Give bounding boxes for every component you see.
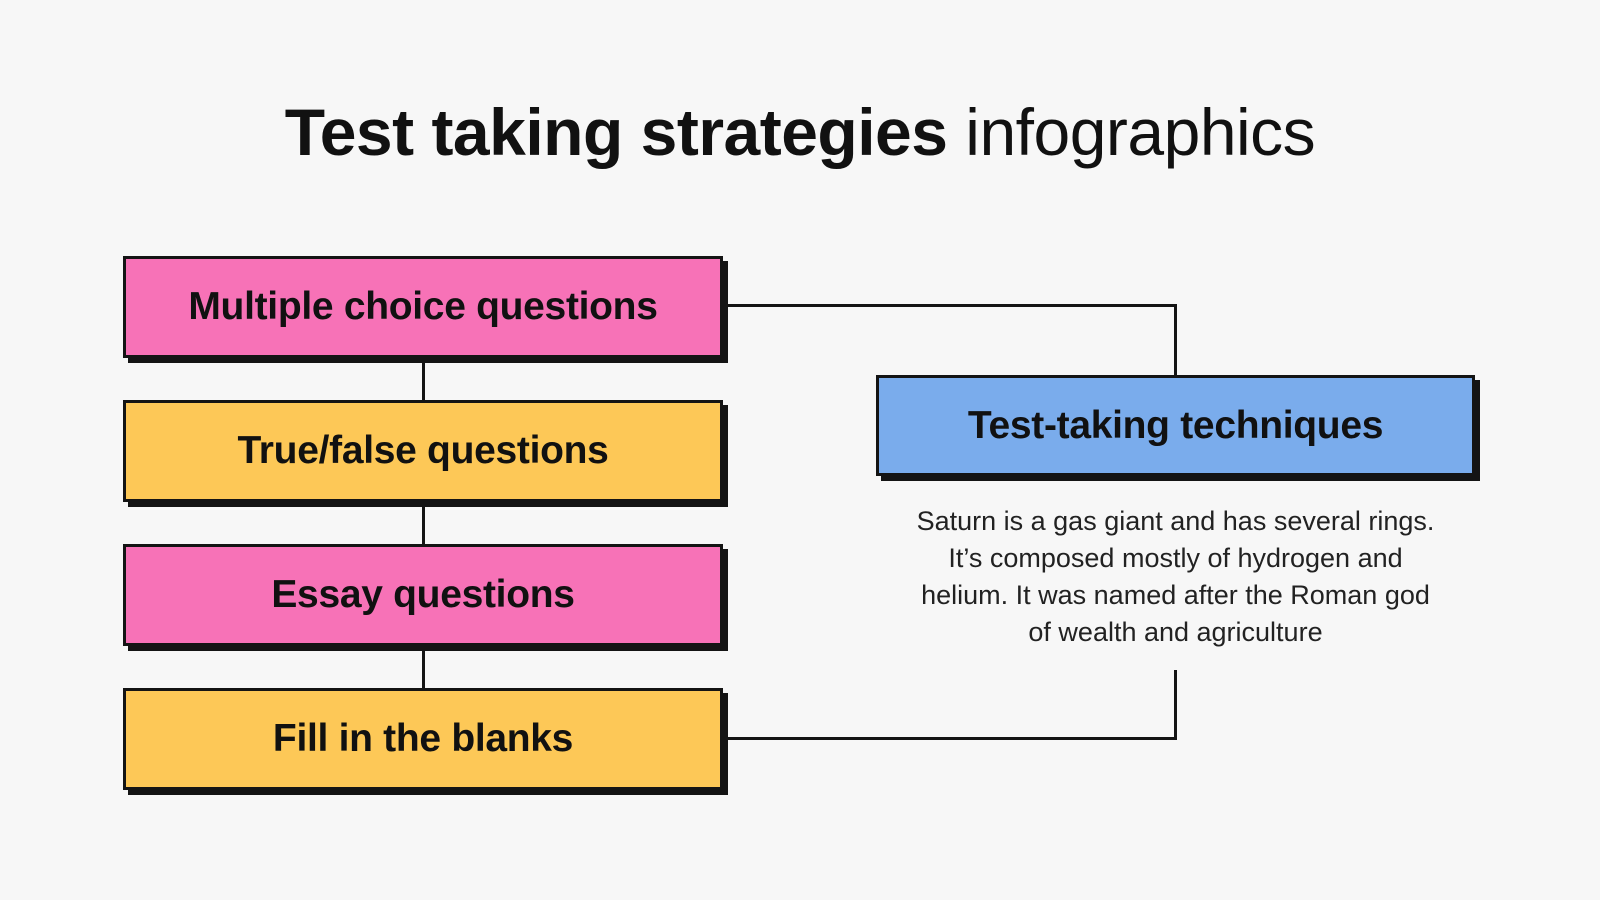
box: techniques: Test-taking techniques	[968, 404, 1383, 446]
box: true/false	[123, 400, 723, 502]
box: essay	[123, 544, 723, 646]
description	[917, 506, 1434, 647]
description: helium. It was named after the Roman god	[921, 580, 1430, 610]
box: multiple choice: Multiple choice questions	[188, 285, 658, 328]
box: true/false: True/false questions	[237, 429, 609, 472]
box: fill in	[123, 688, 723, 790]
box: techniques	[876, 375, 1475, 476]
box: fill in: Fill in the blanks	[273, 717, 573, 760]
title: Test taking strategies infographics	[285, 95, 1315, 169]
box: multiple choice	[123, 256, 723, 358]
description: of wealth and agriculture	[1028, 617, 1323, 647]
box: essay: Essay questions	[271, 573, 575, 616]
description: Saturn is a gas giant and has several rings.	[917, 506, 1434, 536]
description: It’s composed mostly of hydrogen and	[948, 543, 1403, 573]
